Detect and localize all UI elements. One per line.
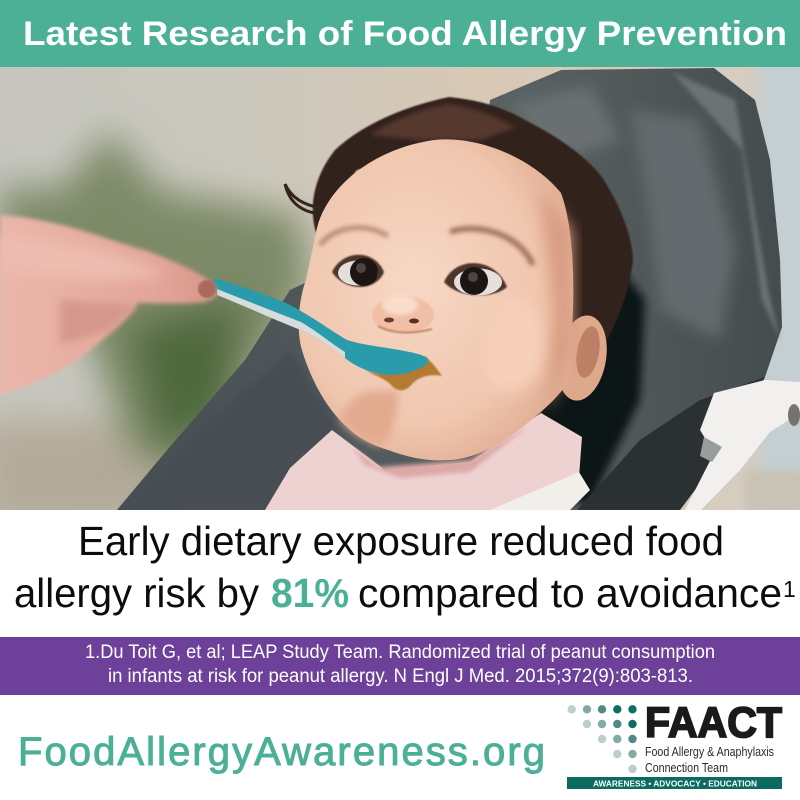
baby face	[299, 139, 573, 460]
FAACT logo	[567, 699, 782, 789]
logo name line 1: Food Allergy & Anaphylaxis	[645, 745, 774, 759]
citation line 2: in infants at risk for peanut allergy. N Engl J Med. 2015;372(9):803-813.	[108, 666, 693, 687]
spoon	[214, 278, 429, 375]
title banner	[0, 0, 800, 67]
statement line 1: Early dietary exposure reduced food	[78, 518, 724, 564]
title banner: Latest Research of Food Allergy Prevention	[23, 15, 787, 53]
statement band	[0, 510, 800, 637]
bib	[265, 413, 582, 510]
footnote marker: 1	[783, 576, 796, 602]
citation band	[0, 637, 800, 695]
logo wordmark: FAACT	[645, 699, 782, 747]
high chair seat	[117, 68, 782, 510]
baby hair	[312, 96, 634, 342]
left eye	[332, 255, 384, 287]
logo name line 2: Connection Team	[645, 761, 728, 775]
photo: baby being spoon-fed in a high chair	[0, 50, 800, 530]
website URL: FoodAllergyAwareness.org	[18, 730, 545, 774]
nose	[372, 295, 434, 334]
puree on lips	[365, 356, 442, 390]
adult hand	[0, 215, 217, 395]
eyebrows	[320, 228, 388, 245]
statement line 2 start: allergy risk by	[14, 570, 259, 616]
chair handle	[684, 380, 800, 512]
81% highlight: 81%	[271, 570, 349, 616]
logo dot triangle	[568, 705, 637, 773]
logo tagline bar: AWARENESS • ADVOCACY • EDUCATION	[593, 778, 757, 788]
citation line 1: 1.Du Toit G, et al; LEAP Study Team. Randomized trial of peanut consumption	[85, 642, 715, 663]
logo tagline bar	[567, 777, 782, 789]
statement line 2 end: compared to avoidance	[358, 570, 782, 616]
right eye	[444, 263, 507, 296]
baby ear	[562, 316, 607, 400]
